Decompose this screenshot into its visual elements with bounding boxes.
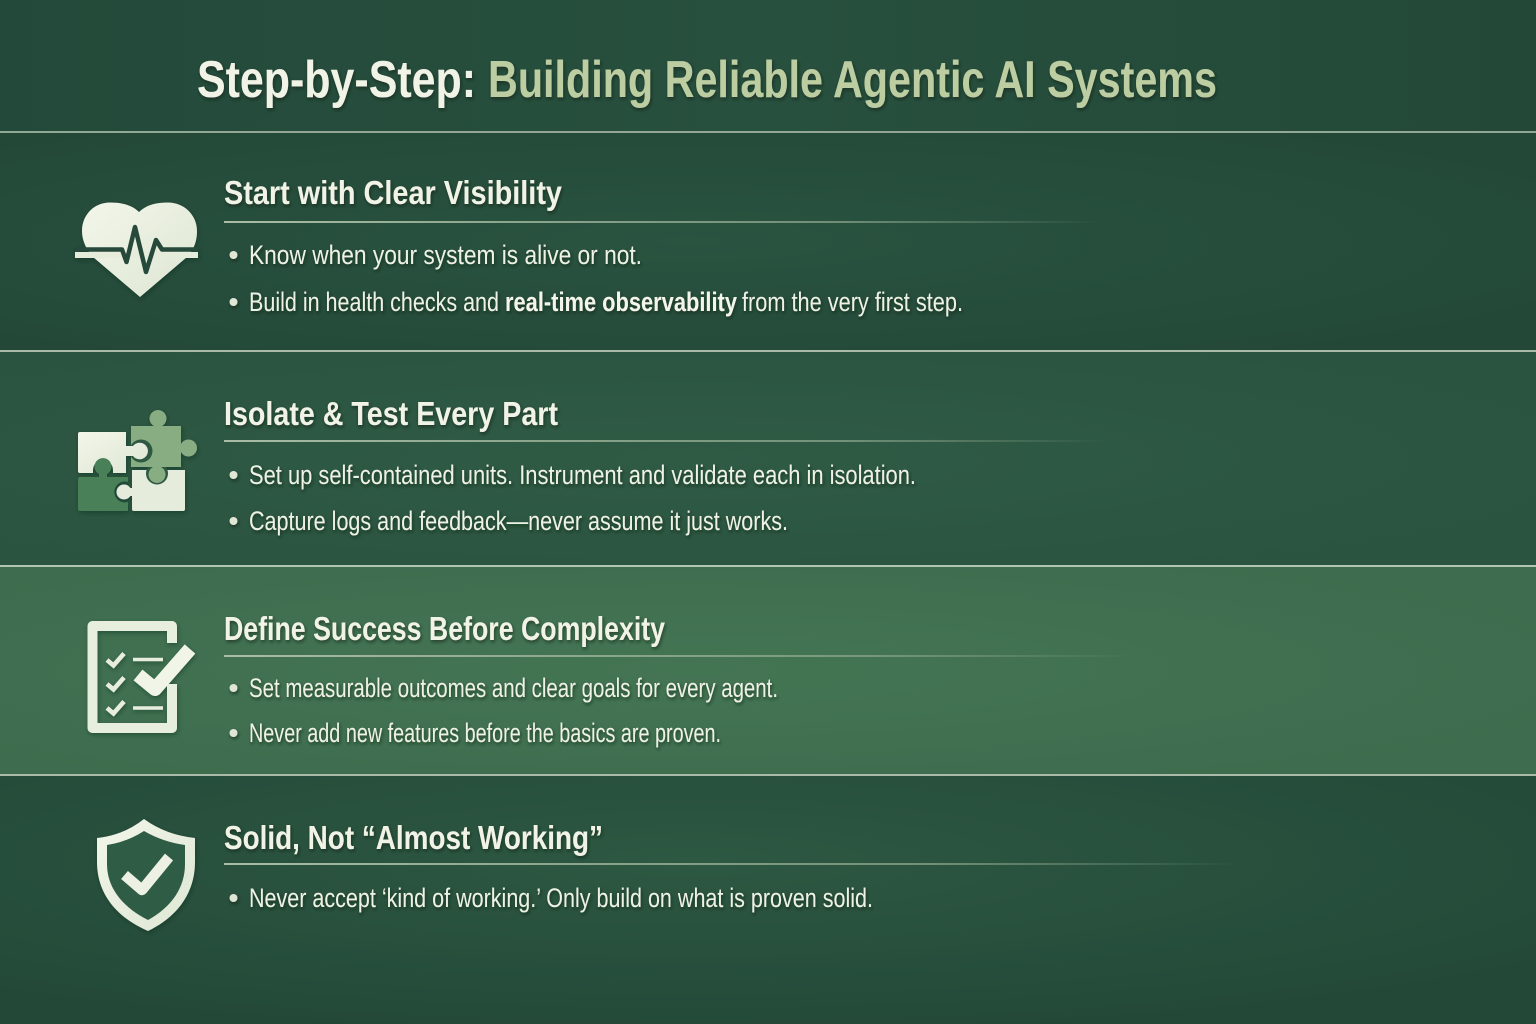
bullet: health checks: real-time observability — [505, 287, 737, 317]
title: Step-by-Step: — [197, 51, 476, 109]
bullet: health checks: from the very first step. — [742, 287, 963, 317]
panel: start with clear visibility — [0, 132, 1536, 351]
bullet: kind of working: Never accept ‘kind of working.’ Only build on what is proven solid. — [249, 883, 873, 913]
heading: start with clear visibility: Start with Clear Visibility — [224, 174, 563, 211]
heading: solid not almost working: Solid, Not “Almost Working” — [224, 819, 603, 856]
title — [197, 51, 1217, 109]
bullet: measurable outcomes: Set measurable outcomes and clear goals for every agent. — [249, 673, 778, 703]
bullet: health checks — [230, 287, 963, 317]
panel: isolate and test — [0, 351, 1536, 566]
icon: shield with check — [97, 819, 195, 931]
bullet: capture logs: Capture logs and feedback—never assume it just works. — [249, 506, 788, 536]
bullet: health checks: Build in health checks and — [249, 287, 499, 317]
heading underline — [224, 655, 1135, 657]
heading underline — [224, 440, 1110, 442]
icon: heart with pulse — [75, 202, 198, 297]
heading: define success: Define Success Before Complexity — [224, 610, 666, 647]
header band — [0, 0, 1536, 132]
panel: define success — [0, 566, 1536, 775]
title: Building Reliable Agentic AI Systems — [488, 51, 1217, 109]
heading underline — [224, 221, 1100, 223]
bullet: self-contained units: Set up self-contained units. Instrument and validate each in isolation. — [249, 460, 916, 490]
icon: checklist — [92, 626, 190, 728]
panel: solid not almost working — [0, 775, 1536, 1024]
icon: puzzle pieces — [78, 410, 197, 511]
bullet: alive: Know when your system is alive or not. — [249, 240, 642, 270]
heading underline — [224, 863, 1240, 865]
bullet: new features: Never add new features before the basics are proven. — [249, 718, 721, 748]
heading: isolate and test: Isolate & Test Every Part — [224, 395, 558, 432]
